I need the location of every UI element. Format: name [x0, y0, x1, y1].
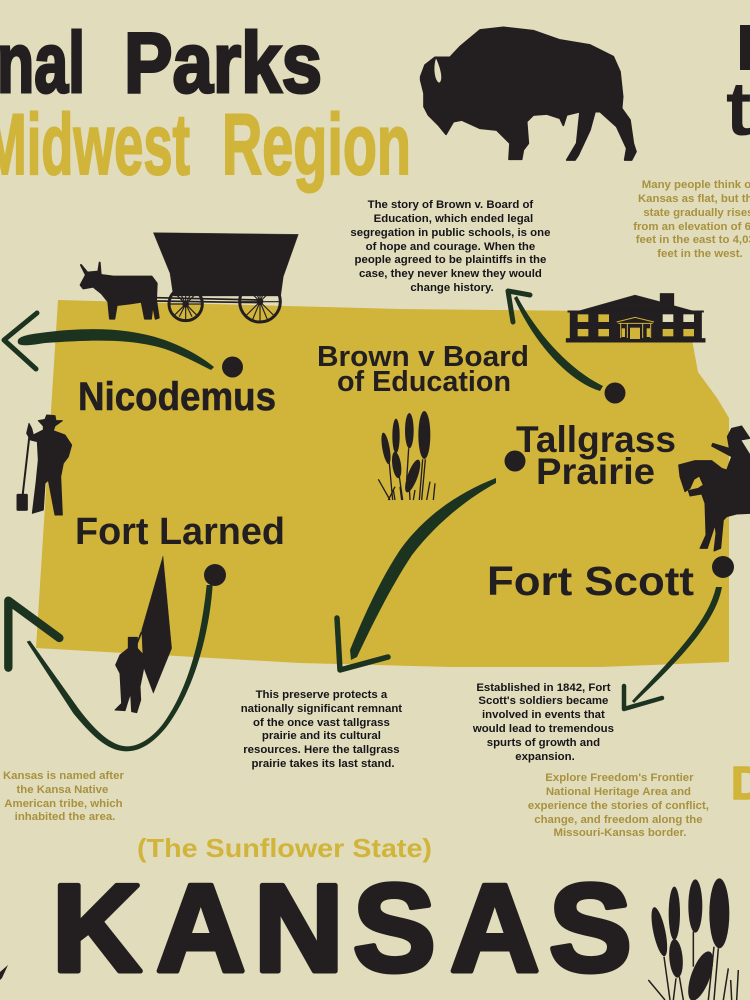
- label: Brown v Board of Education: Brown v Board: [317, 341, 529, 373]
- text: Tallgrass preserve: This preserve protects a: [256, 689, 388, 701]
- label: Fort Larned: Fort Larned: [75, 511, 285, 553]
- text: Brown v. Board of Education: The story of Brown v. Board of: [368, 199, 533, 211]
- arrow: Tallgrass Prairie: [337, 478, 496, 670]
- text: Brown v. Board of Education: case, they never knew they would: [359, 268, 542, 280]
- label: Tallgrass Prairie: Prairie: [536, 451, 655, 492]
- title: National Parks: [0, 16, 322, 111]
- dot: Brown v Board: [604, 382, 626, 404]
- icon: horse and rider: [679, 426, 750, 551]
- label: Brown v Board of Education: of Education: [337, 366, 511, 398]
- text: Freedom's Frontier: Missouri-Kansas border.: [554, 827, 686, 839]
- title: National Parks: nal: [0, 16, 85, 111]
- text: Fort Scott history: expansion.: [515, 751, 575, 763]
- text: Tallgrass preserve: prairie takes its last stand.: [251, 758, 395, 770]
- text: Freedom's Frontier: Explore Freedom's Frontier: [545, 772, 694, 784]
- label: Fort Scott: Fort Scott: [487, 558, 694, 604]
- text: Kansa tribe: Kansas is named after: [3, 770, 124, 782]
- icon: ox and covered wagon: [81, 233, 298, 322]
- icon: prairie grass: [378, 411, 435, 500]
- text: Kansa tribe: inhabited the area.: [15, 811, 115, 823]
- clipped title at right edge: [726, 25, 750, 152]
- text: Brown v. Board of Education: change history.: [410, 282, 494, 294]
- text: Freedom's Frontier: National Heritage Area and: [546, 786, 691, 798]
- icon: historic house: [566, 293, 705, 342]
- icon: soldier with flag: [115, 556, 172, 713]
- title: KANSAS: KANSAS: [52, 860, 632, 998]
- label: Nicodemus: Nicodemus: [78, 375, 276, 419]
- subtitle: Midwest Region: Region: [222, 97, 411, 193]
- dot: Fort Larned: [204, 564, 226, 586]
- text: Tallgrass preserve: resources. Here the tallgrass: [243, 744, 400, 756]
- label: Tallgrass Prairie: Tallgrass: [516, 419, 676, 460]
- text: Tallgrass preserve: prairie and its cultural: [262, 730, 381, 742]
- text: Kansas elevation fact: feet in the west.: [657, 248, 743, 260]
- text: Brown v. Board of Education: people agreed to be plaintiffs in the: [355, 254, 546, 266]
- text: Brown v. Board of Education: segregation in public schools, is one: [350, 227, 550, 239]
- title: National Parks: Parks: [124, 16, 322, 111]
- arrow: Brown v Board: [508, 291, 603, 391]
- text: Fort Scott history: spurts of growth and: [487, 737, 600, 749]
- icon: bison: [421, 27, 636, 160]
- arrow: Fort Scott: [624, 587, 722, 709]
- subtitle: The Sunflower State: (The Sunflower State): [137, 833, 432, 863]
- text: Kansa tribe: the Kansa Native: [17, 784, 108, 796]
- text: Fort Scott history: Scott's soldiers became: [478, 695, 608, 707]
- text: Tallgrass preserve: of the once vast tallgrass: [253, 717, 390, 729]
- text: Fort Scott history: involved in events that: [482, 709, 605, 721]
- text: Fort Scott history: would lead to tremendous: [472, 723, 614, 735]
- text: Freedom's Frontier: experience the stories of conflict,: [528, 800, 709, 812]
- map of Kansas: [36, 300, 729, 667]
- text: Freedom's Frontier: change, and freedom along the: [534, 814, 703, 826]
- dot: Nicodemus: [222, 356, 243, 378]
- text: Tallgrass preserve: nationally significant remnant: [241, 703, 402, 715]
- arrow: Fort Larned: [8, 585, 213, 751]
- arrow: Nicodemus: [4, 313, 214, 370]
- text: Brown v. Board of Education: of hope and courage. When the: [366, 241, 535, 253]
- icon: tall grass bottom right: [648, 878, 738, 1000]
- dot: Fort Scott: [712, 556, 734, 578]
- icon: farmer with shovel: [17, 415, 72, 515]
- label: Brown v Board of Education: [317, 341, 529, 398]
- text: Fort Scott history: Established in 1842, Fort: [476, 682, 611, 694]
- icon: grass tip bottom left: [0, 965, 8, 980]
- text: Kansa tribe: American tribe, which: [4, 798, 123, 810]
- dot: Tallgrass Prairie: [504, 450, 526, 472]
- text: Brown v. Board of Education: Education, which ended legal: [374, 213, 533, 225]
- label: Tallgrass Prairie: [516, 419, 676, 492]
